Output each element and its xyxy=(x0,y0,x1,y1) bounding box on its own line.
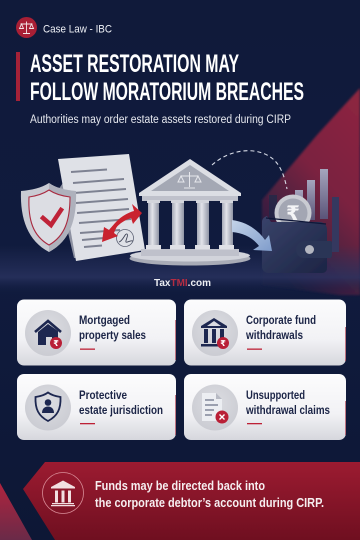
chart: growth bars xyxy=(269,169,339,252)
icon: protective shield with check xyxy=(21,183,76,252)
title: ASSET RESTORATION MAY xyxy=(30,50,239,78)
icon: bank with rupee: ₹ xyxy=(220,339,226,348)
card text: withdrawals xyxy=(245,328,303,342)
card text xyxy=(79,313,146,342)
footer banner xyxy=(0,462,360,540)
card: corporate fund withdrawals xyxy=(184,300,346,366)
card text: Mortgaged xyxy=(79,313,130,327)
card text: Unsupported xyxy=(246,388,305,402)
card text xyxy=(245,313,316,342)
card text: property sales xyxy=(79,328,146,342)
card text: estate jurisdiction xyxy=(79,403,163,417)
footer text: Funds may be directed back into xyxy=(95,478,265,493)
icon: court building xyxy=(130,159,250,266)
card text: Corporate fund xyxy=(246,313,316,327)
icon: house with rupee: ₹ xyxy=(53,339,59,348)
header badge: Case Law - IBC xyxy=(43,24,112,36)
brand: TaxTMI.com: TaxTMI.com xyxy=(154,277,211,289)
card text: Protective xyxy=(79,388,127,402)
card text xyxy=(245,388,330,417)
icon: rupee coin xyxy=(274,194,312,232)
hero illustration xyxy=(21,151,339,273)
card text: withdrawal claims xyxy=(245,403,330,417)
header badge xyxy=(16,17,112,38)
subtitle: Authorities may order estate assets restored during CIRP xyxy=(30,114,291,126)
icon: bank in circle xyxy=(42,472,84,514)
icon: house with rupee xyxy=(35,321,62,349)
footer text: the corporate debtor’s account during CIRP. xyxy=(95,495,324,510)
footer text xyxy=(95,478,324,510)
icon: document with cross xyxy=(202,393,228,424)
columns xyxy=(146,200,234,250)
card: unsupported withdrawal claims xyxy=(184,374,346,440)
icon: scales badge xyxy=(16,17,37,38)
icon: shield with person xyxy=(35,392,61,421)
arrow: red double arrow xyxy=(102,204,142,242)
title xyxy=(16,50,304,106)
card text xyxy=(79,388,163,417)
icon: bank with rupee xyxy=(201,318,229,349)
arrow: blue curved arrow xyxy=(232,220,272,251)
arrow: dashed curve xyxy=(212,151,287,189)
card: mortgaged property sales xyxy=(17,300,176,366)
card: protective estate jurisdiction xyxy=(17,374,176,440)
icon: rupee coin: ₹ xyxy=(286,203,300,225)
icon: wallet xyxy=(262,216,332,273)
icon: legal document xyxy=(58,154,145,261)
